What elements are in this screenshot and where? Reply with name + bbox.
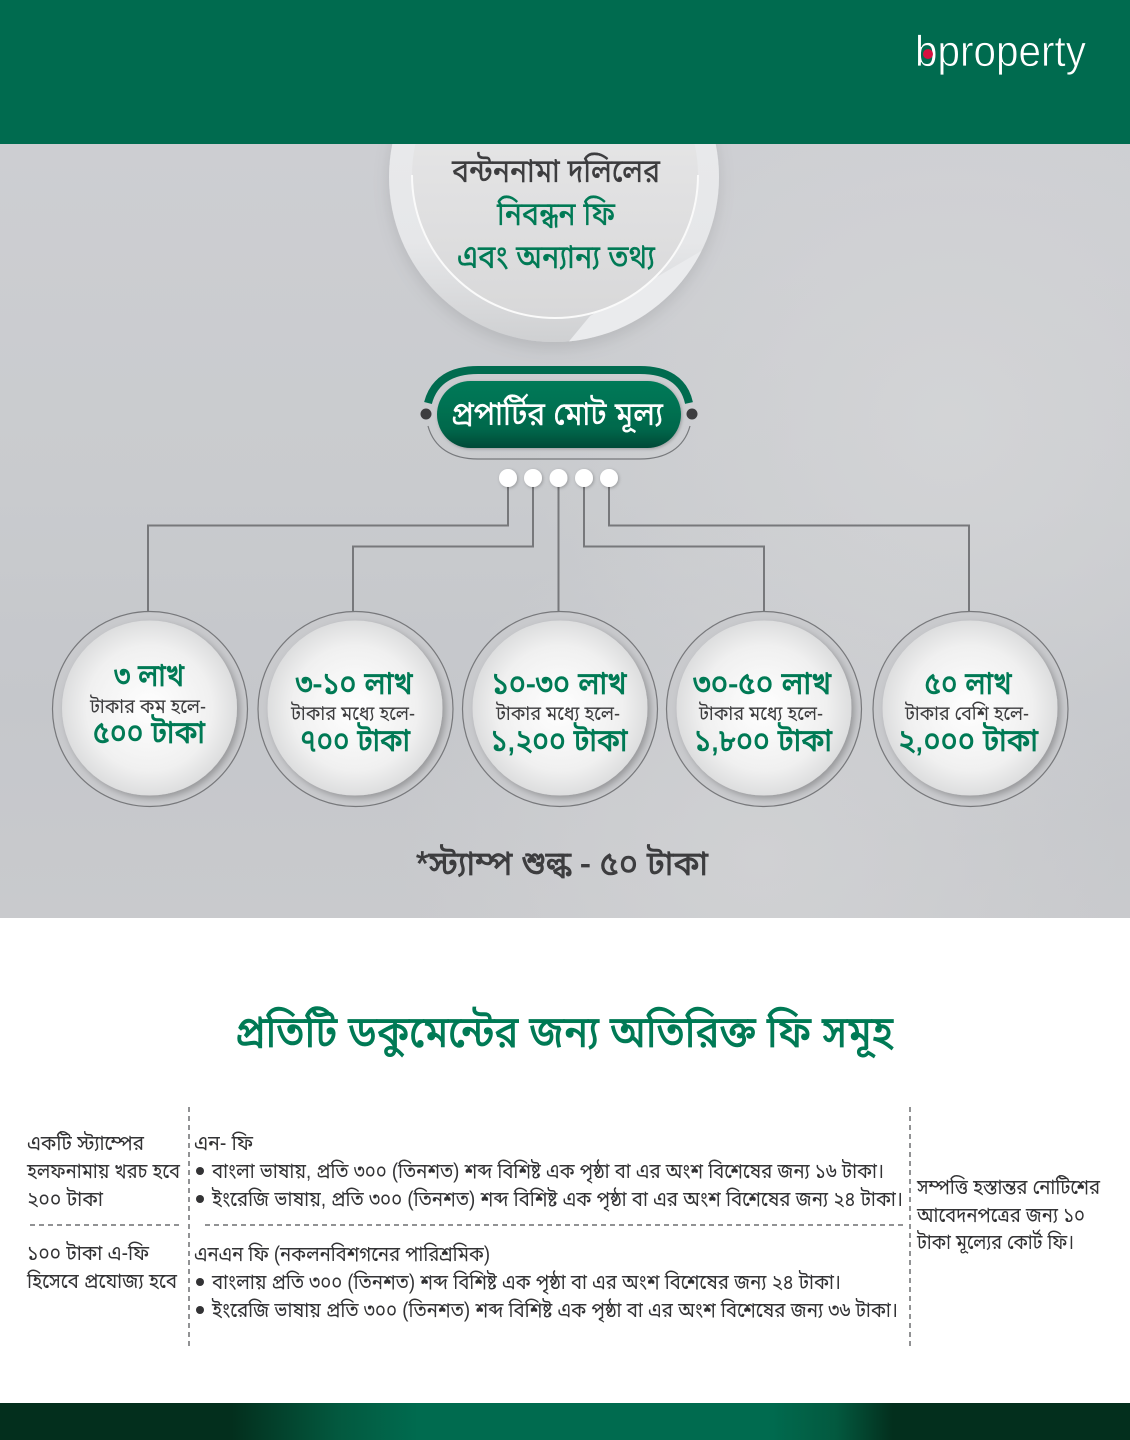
title disc bbox=[387, 144, 721, 350]
logo: bproperty: bproperty bbox=[915, 27, 1086, 76]
total value badge bbox=[420, 370, 698, 459]
NN-fee details: ইংরেজি ভাষায় প্রতি ৩০০ (তিনশত) শব্দ বিশিষ্ট এক পৃষ্ঠা বা এর অংশ বিশেষের জন্য ৩৬ টাকা। bbox=[211, 1297, 898, 1323]
N-fee details: বাংলা ভাষায়, প্রতি ৩০০ (তিনশত) শব্দ বিশিষ্ট এক পৃষ্ঠা বা এর অংশ বিশেষের জন্য ১৬ টাকা। bbox=[211, 1158, 884, 1184]
court fee note: আবেদনপত্রের জন্য ১০ bbox=[916, 1204, 1085, 1227]
fee circle 2: টাকার মধ্যে হলে- bbox=[290, 701, 415, 725]
additional fees heading: প্রতিটি ডকুমেন্টের জন্য অতিরিক্ত ফি সমূহ bbox=[235, 1006, 893, 1059]
fee circle 5: ৫০ লাখ bbox=[924, 666, 1012, 701]
fee circle 2: ৭০০ টাকা bbox=[300, 723, 411, 758]
footer band bbox=[0, 1403, 1130, 1440]
N-fee details: এন- ফি bbox=[194, 1131, 253, 1155]
table dividers bbox=[30, 1107, 910, 1346]
affidavit stamp note: একটি স্ট্যাম্পের bbox=[27, 1131, 144, 1155]
connector dots bbox=[499, 469, 618, 487]
court fee note: টাকা মূল্যের কোর্ট ফি। bbox=[916, 1229, 1074, 1255]
fee circle 1: টাকার কম হলে- bbox=[89, 694, 206, 718]
title text: নিবন্ধন ফি bbox=[496, 194, 615, 232]
NN-fee details: বাংলায় প্রতি ৩০০ (তিনশত) শব্দ বিশিষ্ট এক পৃষ্ঠা বা এর অংশ বিশেষের জন্য ২৪ টাকা। bbox=[211, 1269, 841, 1295]
fee circle 1: ৫০০ টাকা bbox=[93, 715, 206, 750]
fee circle 5: টাকার বেশি হলে- bbox=[904, 701, 1029, 725]
grey background panel bbox=[0, 144, 1130, 918]
fee circle 2: ৩-১০ লাখ bbox=[296, 666, 413, 701]
fee circle 5 bbox=[873, 612, 1068, 806]
A-fee note bbox=[26, 1241, 177, 1293]
fee circle 5: ২,০০০ টাকা bbox=[898, 723, 1039, 758]
fee circle 1: ৩ লাখ bbox=[114, 658, 184, 693]
fee circle 1 bbox=[52, 612, 248, 806]
fee circle 3: টাকার মধ্যে হলে- bbox=[495, 701, 620, 725]
fee circle 3: ১০-৩০ লাখ bbox=[492, 666, 627, 701]
affidavit stamp note: হলফনামায় খরচ হবে bbox=[26, 1160, 180, 1183]
A-fee note: হিসেবে প্রযোজ্য হবে bbox=[26, 1269, 177, 1293]
NN-fee details bbox=[194, 1242, 898, 1323]
court fee note: সম্পত্তি হস্তান্তর নোটিশের bbox=[916, 1175, 1100, 1199]
stamp duty note: *স্ট্যাম্প শুল্ক - ৫০ টাকা bbox=[416, 844, 709, 883]
N-fee details: ইংরেজি ভাষায়, প্রতি ৩০০ (তিনশত) শব্দ বিশিষ্ট এক পৃষ্ঠা বা এর অংশ বিশেষের জন্য ২৪ টাকা। bbox=[211, 1186, 903, 1212]
total value badge: প্রপার্টির মোট মূল্য bbox=[451, 393, 664, 433]
court fee note bbox=[916, 1175, 1100, 1255]
fee circle 3: ১,২০০ টাকা bbox=[490, 723, 628, 758]
fee circle 4 bbox=[666, 612, 862, 806]
connector lines bbox=[148, 480, 969, 612]
title text bbox=[451, 151, 660, 275]
title text: বন্টননামা দলিলের bbox=[451, 151, 660, 189]
A-fee note: ১০০ টাকা এ-ফি bbox=[27, 1241, 149, 1265]
fee circle 2 bbox=[258, 612, 453, 806]
affidavit stamp note: ২০০ টাকা bbox=[27, 1187, 103, 1211]
affidavit stamp note bbox=[26, 1131, 180, 1211]
header band bbox=[0, 0, 1130, 144]
N-fee details bbox=[194, 1131, 903, 1212]
fee circle 4: টাকার মধ্যে হলে- bbox=[698, 701, 823, 725]
fee circle 4: ১,৮০০ টাকা bbox=[694, 723, 833, 758]
fee circle 3 bbox=[462, 612, 658, 806]
fee circle 4: ৩০-৫০ লাখ bbox=[693, 666, 831, 701]
title text: এবং অন্যান্য তথ্য bbox=[457, 238, 656, 275]
NN-fee details: এনএন ফি (নকলনবিশগনের পারিশ্রমিক) bbox=[194, 1242, 490, 1266]
